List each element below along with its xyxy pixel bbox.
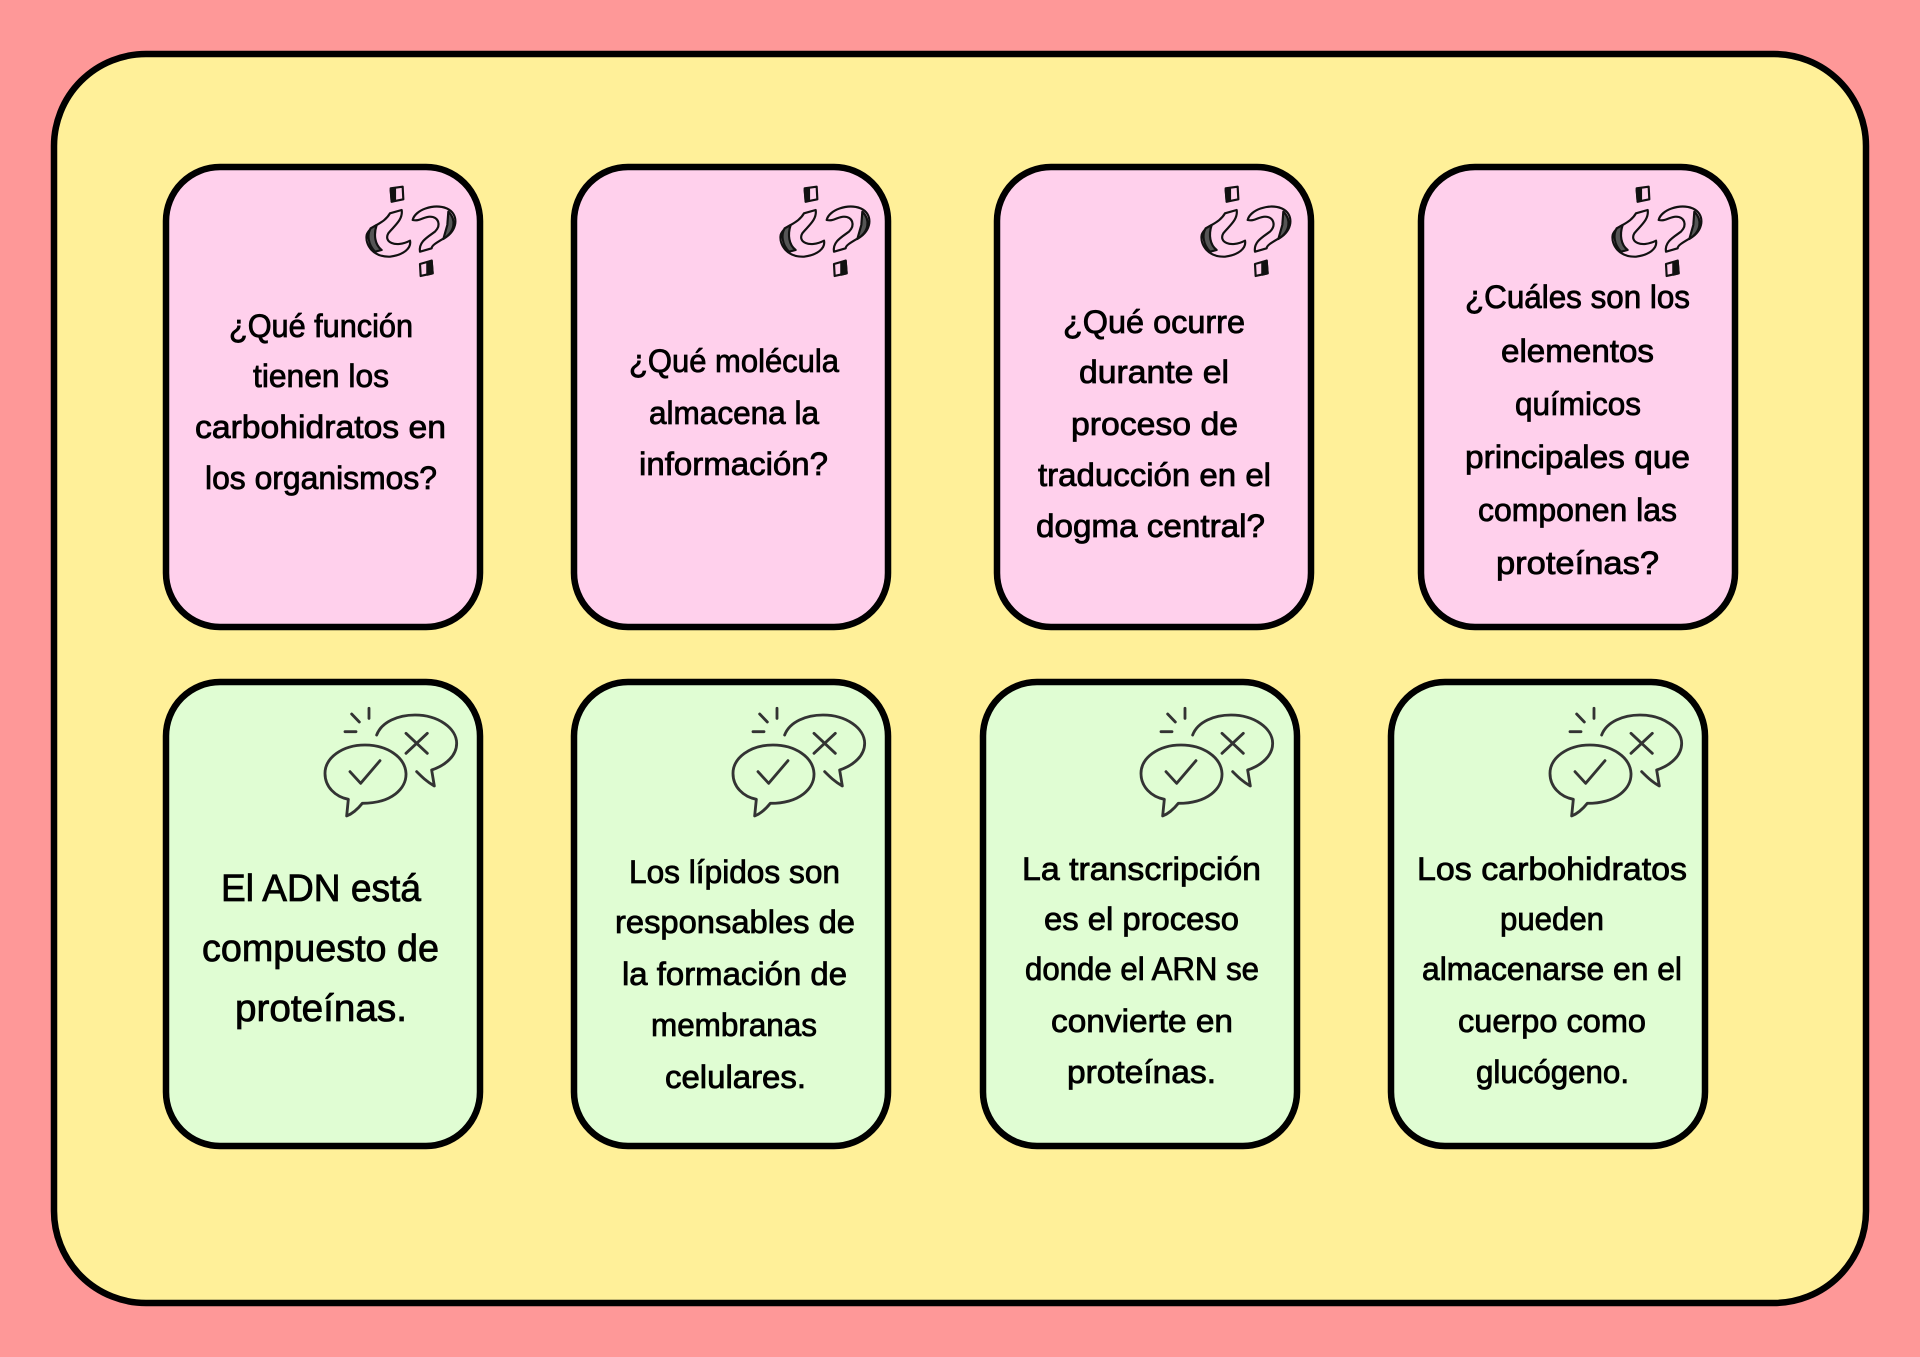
text: statement 4: Los carbohidratos	[1417, 851, 1687, 887]
text: question 3: proceso de	[1071, 406, 1238, 442]
text: statement 4: pueden	[1500, 901, 1604, 937]
text: statement 4: glucógeno.	[1476, 1054, 1629, 1090]
text: question 3: durante el	[1079, 354, 1229, 390]
text: question 3: dogma central?	[1036, 508, 1265, 544]
text: statement 3	[1022, 851, 1261, 1090]
text: question 3: traducción en el	[1038, 457, 1271, 493]
text: statement 2: responsables de	[615, 904, 855, 940]
icon: true false speech bubbles 2	[733, 708, 865, 816]
panel: statement card 4	[1391, 682, 1705, 1146]
text: statement 1: proteínas.	[235, 988, 407, 1030]
text: question 4: químicos	[1515, 386, 1641, 422]
panel: statement card 2	[574, 682, 888, 1146]
panel: question card 1	[166, 167, 480, 627]
text: statement 1	[202, 868, 439, 1030]
text: question 2: ¿Qué molécula	[629, 343, 839, 379]
text: statement 2	[615, 854, 855, 1095]
panel: question card 2	[574, 167, 888, 627]
text: question 4: proteínas?	[1496, 545, 1659, 581]
text: statement 2: Los lípidos son	[629, 854, 840, 890]
text: statement 4: cuerpo como	[1458, 1003, 1646, 1039]
text: statement 2: la formación de	[622, 956, 847, 992]
text: statement 3: donde el ARN se	[1025, 951, 1259, 987]
text: statement 3: La transcripción	[1022, 851, 1261, 887]
text: statement 3: proteínas.	[1067, 1054, 1216, 1090]
text: question 1: ¿Qué función	[229, 308, 413, 344]
text: statement 3: es el proceso	[1044, 901, 1239, 937]
icon: true false speech bubbles 1	[325, 708, 457, 816]
text: question 1: carbohidratos en	[195, 409, 446, 445]
text: question 4: principales que	[1465, 439, 1690, 475]
text: question 1: los organismos?	[205, 460, 437, 496]
icon: question marks 1	[366, 187, 455, 276]
text: question 2	[629, 343, 839, 482]
text: question 2: información?	[639, 446, 828, 482]
icon: true false speech bubbles 4	[1550, 708, 1682, 816]
text: question 3: ¿Qué ocurre	[1063, 304, 1245, 340]
text: statement 2: membranas	[651, 1007, 817, 1043]
text: question 1: tienen los	[253, 358, 389, 394]
icon: true false speech bubbles 3	[1141, 708, 1273, 816]
text: statement 1: El ADN está	[221, 868, 422, 910]
panel: question card 3	[997, 167, 1311, 627]
panel: question card 4	[1421, 167, 1735, 627]
text: question 4: elementos	[1501, 333, 1654, 369]
text: statement 2: celulares.	[665, 1059, 806, 1095]
text: question 1	[195, 308, 446, 496]
text: statement 4	[1417, 851, 1687, 1090]
panel: statement card 3	[983, 682, 1297, 1146]
icon: question marks 4	[1612, 187, 1701, 276]
icon: question marks 3	[1201, 187, 1290, 276]
text: question 2: almacena la	[649, 395, 819, 431]
text: question 4	[1465, 279, 1690, 581]
text: question 3	[1036, 304, 1271, 544]
text: statement 4: almacenarse en el	[1422, 951, 1682, 987]
panel: statement card 1	[166, 682, 480, 1146]
text: question 4: ¿Cuáles son los	[1465, 279, 1690, 315]
text: statement 3: convierte en	[1051, 1003, 1233, 1039]
text: statement 1: compuesto de	[202, 928, 439, 970]
text: question 4: componen las	[1478, 492, 1677, 528]
icon: question marks 2	[780, 187, 869, 276]
